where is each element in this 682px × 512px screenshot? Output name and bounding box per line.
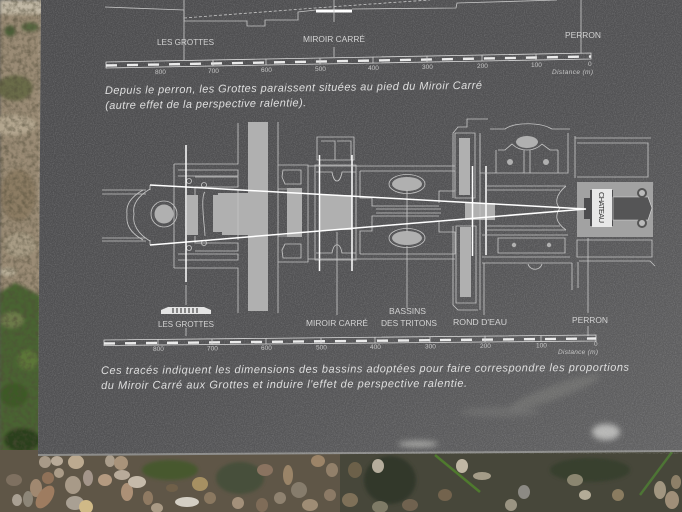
distance scale: elevation: 100 bbox=[531, 62, 542, 69]
distance scale: plan: 700 bbox=[207, 346, 218, 352]
ground: sand and grass at left bbox=[0, 0, 45, 512]
distance scale: elevation: 400 bbox=[368, 65, 379, 72]
caption: elevation bbox=[105, 80, 482, 112]
label: perron (elevation): PERRON bbox=[565, 30, 601, 40]
label: bassins des tritons: BASSINS bbox=[389, 306, 426, 316]
distance scale: plan: 400 bbox=[370, 344, 381, 351]
upper parterre bbox=[480, 124, 570, 173]
distance scale: plan: 200 bbox=[480, 343, 491, 350]
label: rond d'eau: ROND D'EAU bbox=[453, 317, 507, 327]
caption: elevation: Depuis le perron, les Grottes paraissent situées au pied du Miroir Carré bbox=[105, 80, 482, 97]
avenue band bbox=[248, 122, 268, 311]
caption: plan: Ces tracés indiquent les dimensions des bassins adoptées pour faire correspondre les proportions bbox=[101, 362, 630, 377]
distance scale: elevation: 700 bbox=[208, 68, 219, 75]
distance scale: elevation: 0 bbox=[588, 61, 592, 68]
grotte icon bbox=[161, 307, 211, 314]
distance scale: plan bbox=[104, 335, 598, 356]
ground: gravel below the slab bbox=[0, 450, 682, 512]
label: les grottes: LES GROTTES bbox=[158, 319, 214, 329]
white axis and sight lines bbox=[185, 145, 187, 282]
label: miroir carré (elevation): MIROIR CARRÉ bbox=[303, 34, 365, 44]
middle basin bbox=[278, 165, 308, 262]
distance scale: elevation: 200 bbox=[477, 63, 488, 70]
lower parterre bbox=[482, 186, 572, 315]
rond d'eau and long basins bbox=[453, 119, 495, 310]
label: les grottes (elevation): LES GROTTES bbox=[157, 37, 214, 47]
distance scale: elevation: 800 bbox=[155, 69, 166, 76]
right gardens bbox=[575, 136, 655, 288]
distance scale: plan: 800 bbox=[153, 346, 164, 353]
label: perron: PERRON bbox=[572, 315, 608, 325]
château: CHATEAU bbox=[597, 192, 606, 223]
distance scale: elevation: 300 bbox=[422, 64, 433, 71]
distance scale: plan: 0 bbox=[594, 341, 598, 348]
distance scale: elevation: Distance (m) bbox=[552, 69, 593, 76]
château bbox=[577, 182, 653, 237]
bassins des tritons bbox=[308, 166, 455, 308]
distance scale: elevation: 600 bbox=[261, 67, 272, 74]
distance scale: elevation: 500 bbox=[315, 66, 326, 73]
miroir carré bbox=[315, 137, 356, 315]
label: bassins des tritons: DES TRITONS bbox=[381, 318, 437, 328]
label: bassins des tritons bbox=[381, 306, 437, 328]
distance scale: plan: Distance (m) bbox=[558, 349, 598, 356]
distance scale: plan: 100 bbox=[536, 342, 547, 350]
caption: elevation: (autre effet de la perspective ralentie). bbox=[105, 97, 306, 112]
elevation profile bbox=[105, 0, 581, 60]
caption: plan: du Miroir Carré aux Grottes et induire l'effet de perspective ralentie. bbox=[101, 378, 467, 392]
distance scale: elevation bbox=[106, 53, 593, 76]
worn stains bbox=[398, 369, 620, 447]
caption: plan bbox=[101, 362, 630, 392]
grottes basins bbox=[102, 122, 278, 313]
distance scale: plan: 500 bbox=[316, 344, 327, 352]
distance scale: plan: 300 bbox=[425, 344, 436, 350]
plan of the garden bbox=[102, 119, 655, 336]
distance scale: plan: 600 bbox=[261, 345, 272, 352]
label: miroir carré: MIROIR CARRÉ bbox=[306, 318, 368, 328]
